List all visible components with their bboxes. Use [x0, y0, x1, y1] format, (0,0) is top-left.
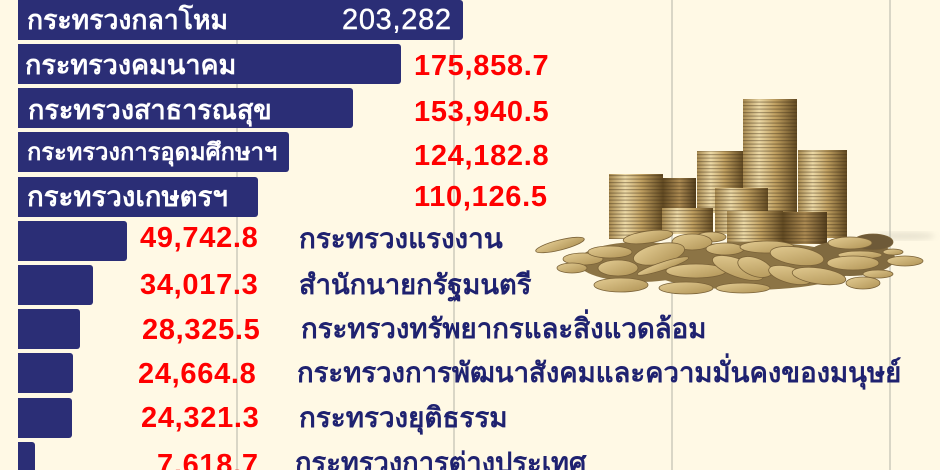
value: 203,282: 203,282 [342, 4, 452, 36]
bar: กระทรวงยุติธรรม [18, 398, 72, 438]
label: กระทรวงคมนาคม: กระทรวงคมนาคม [25, 50, 236, 80]
bar: กระทรวงเกษตรฯ [18, 176, 258, 216]
value: 110,126.5: 110,126.5 [414, 181, 548, 213]
label: กระทรวงกลาโหม: กระทรวงกลาโหม [27, 5, 228, 35]
bar: กระทรวงการพัฒนาสังคมฯ [18, 353, 72, 393]
value: 34,017.3: 34,017.3 [140, 269, 258, 301]
label: กระทรวงเกษตรฯ: กระทรวงเกษตรฯ [27, 181, 228, 212]
bar: กระทรวงกลาโหม [18, 0, 463, 40]
value: 153,940.5: 153,940.5 [414, 96, 549, 128]
bar: กระทรวงสาธารณสุข [18, 88, 353, 128]
bar: กระทรวงแรงงาน [18, 221, 127, 261]
label: กระทรวงการพัฒนาสังคมและความมั่นคงของมนุษย์: กระทรวงการพัฒนาสังคมและความมั่นคงของมนุษย์ [297, 357, 901, 388]
label: กระทรวงแรงงาน: กระทรวงแรงงาน [299, 223, 503, 254]
icon: coin stacks [535, 99, 932, 294]
label: กระทรวงทรัพยากรและสิ่งแวดล้อม: กระทรวงทรัพยากรและสิ่งแวดล้อม [301, 313, 706, 344]
bar: สำนักนายกรัฐมนตรี [18, 265, 93, 305]
value: 28,325.5: 28,325.5 [142, 314, 260, 346]
label: กระทรวงสาธารณสุข: กระทรวงสาธารณสุข [28, 95, 272, 125]
value: 24,664.8: 24,664.8 [138, 358, 256, 390]
bar: กระทรวงการต่างประเทศ [18, 442, 35, 470]
label: กระทรวงการอุดมศึกษาฯ: กระทรวงการอุดมศึกษาฯ [27, 140, 277, 166]
value: 124,182.8: 124,182.8 [414, 140, 549, 172]
value: 24,321.3: 24,321.3 [141, 402, 260, 434]
bar: กระทรวงคมนาคม [18, 44, 401, 84]
value: 49,742.8: 49,742.8 [140, 222, 258, 254]
value: 175,858.7: 175,858.7 [414, 50, 549, 82]
label: กระทรวงยุติธรรม: กระทรวงยุติธรรม [299, 402, 508, 433]
label: สำนักนายกรัฐมนตรี: สำนักนายกรัฐมนตรี [299, 269, 531, 300]
bar: กระทรวงทรัพยากรและสิ่งแวดล้อม [18, 309, 80, 349]
bar: กระทรวงการอุดมศึกษาฯ [18, 132, 289, 172]
